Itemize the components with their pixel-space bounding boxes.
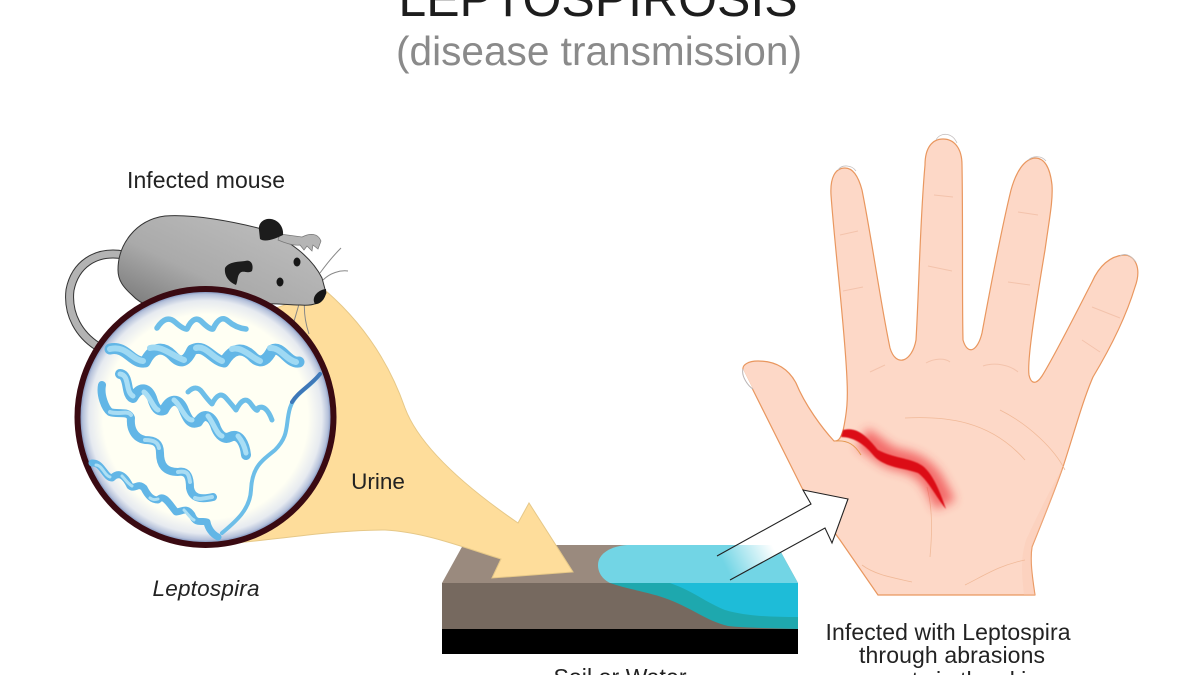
bacterium 6 — [92, 463, 218, 537]
thumb crease — [836, 441, 861, 455]
soil top — [442, 545, 798, 583]
bacterium 2 — [110, 347, 299, 362]
hand — [743, 134, 1138, 595]
mouse nose — [314, 289, 326, 304]
white arrow to hand — [717, 490, 848, 580]
soil and water block — [442, 545, 798, 654]
thumb nail — [743, 369, 753, 389]
label: infected mouse: Infected mouse — [127, 167, 285, 193]
magnifier circle: leptospira — [78, 289, 334, 545]
label: infected with leptospira: Infected with Leptospira — [826, 619, 1071, 645]
mouse — [70, 216, 348, 346]
water surface — [598, 545, 798, 583]
mouse body — [118, 216, 326, 315]
bacterium 1 — [157, 319, 246, 329]
soil front — [442, 583, 798, 629]
bacterium 3 — [120, 374, 246, 455]
mouse paw — [278, 234, 321, 251]
bedrock — [442, 629, 798, 654]
water depth — [610, 583, 798, 629]
bacterium 5 — [102, 385, 213, 499]
wound cut — [841, 429, 946, 509]
label: urine: Urine — [351, 469, 405, 494]
label: leptospira: Leptospira — [152, 576, 260, 601]
mouse ear — [259, 219, 283, 240]
label: infected with leptospira — [826, 619, 1071, 675]
hand outline — [743, 139, 1138, 595]
mouse whiskers — [292, 248, 348, 334]
subtitle: (disease transmission) — [396, 28, 802, 74]
urine stream arrow — [225, 291, 573, 578]
label: infected with leptospira: through abrasions — [859, 642, 1045, 668]
bacterium 4 — [188, 388, 272, 420]
wound glow — [862, 438, 945, 505]
mouse tail — [70, 254, 124, 346]
finger nails — [838, 134, 1136, 262]
mouse eyes — [294, 258, 300, 266]
bacterium 7: flagellum — [222, 374, 320, 533]
mouse spot — [225, 261, 253, 285]
palm shading — [1022, 467, 1063, 595]
palm lines — [862, 410, 1065, 585]
creases — [840, 195, 1120, 372]
